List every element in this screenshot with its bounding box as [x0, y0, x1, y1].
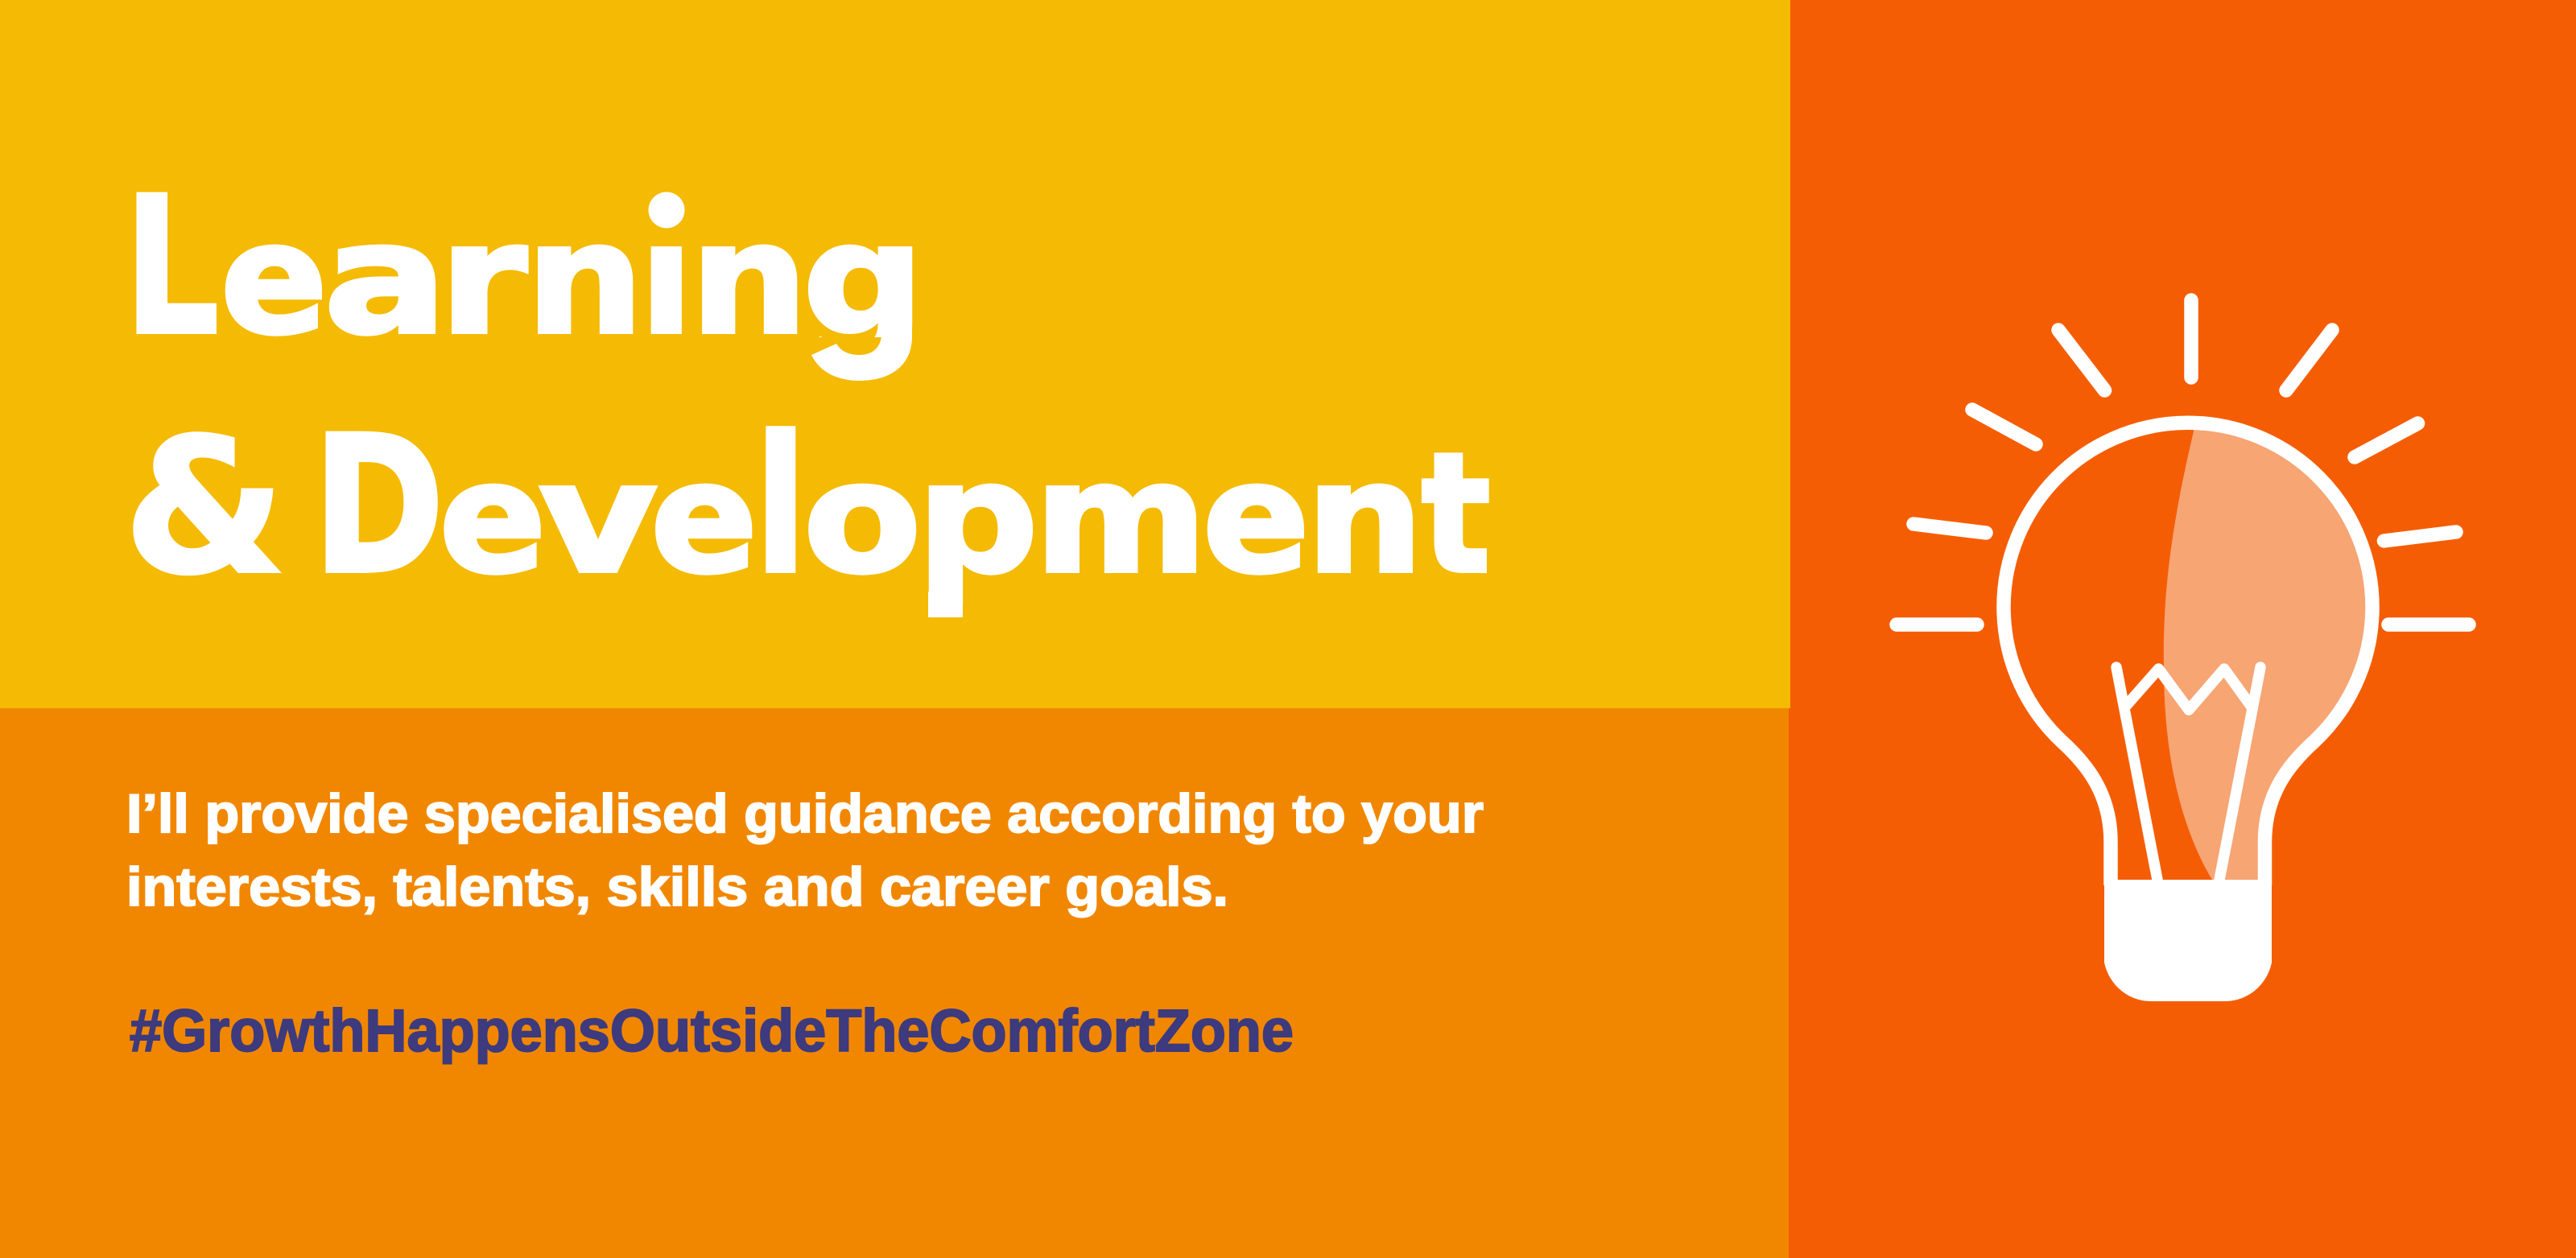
description line 1: I’ll provide specialised guidance according to your	[126, 783, 1484, 844]
title line: Learning: a	[324, 190, 448, 369]
title line: & Development: v	[539, 430, 658, 607]
title line: & Development: n	[1306, 430, 1423, 607]
title line: & Development: e	[1203, 430, 1310, 607]
title line: Learning: i	[640, 190, 692, 369]
bulb highlight	[2164, 421, 2375, 880]
letter g tail	[805, 322, 912, 381]
title line: & Development: l	[755, 398, 807, 617]
title line: & Development: e	[440, 430, 547, 607]
title line: & Development: t	[1422, 417, 1491, 610]
title line: & Development: &	[124, 401, 285, 615]
title line: & Development: p	[917, 430, 1038, 607]
panel: orange description background	[0, 708, 1789, 1258]
bulb outline	[2004, 423, 2372, 885]
title line: & Development: e	[650, 430, 758, 607]
bulb base	[2104, 880, 2272, 1001]
icon: light bulb	[1897, 300, 2469, 1001]
title line: Learning: L	[124, 158, 219, 377]
description line 2: interests, talents, skills and career goals.	[126, 856, 1228, 918]
title line: & Development: m	[1034, 430, 1208, 607]
letter p descender	[928, 592, 963, 617]
title	[124, 158, 1491, 617]
title line: Learning: e	[221, 190, 328, 369]
title line: Learning: n	[691, 190, 808, 369]
title line: & Development: D	[312, 396, 444, 617]
title line: Learning: r	[439, 190, 527, 369]
title line: Learning: g	[803, 190, 924, 369]
description text	[126, 783, 1484, 918]
letter i round dot	[644, 192, 689, 242]
panel: right orange background	[1790, 0, 2576, 1258]
light rays	[1897, 300, 2469, 625]
title line: Learning: n	[526, 190, 644, 369]
title line: & Development: o	[803, 430, 922, 607]
panel: yellow title background	[0, 0, 1790, 708]
hashtag: #GrowthHappensOutsideTheComfortZone	[130, 997, 1294, 1064]
filament	[2116, 667, 2260, 880]
